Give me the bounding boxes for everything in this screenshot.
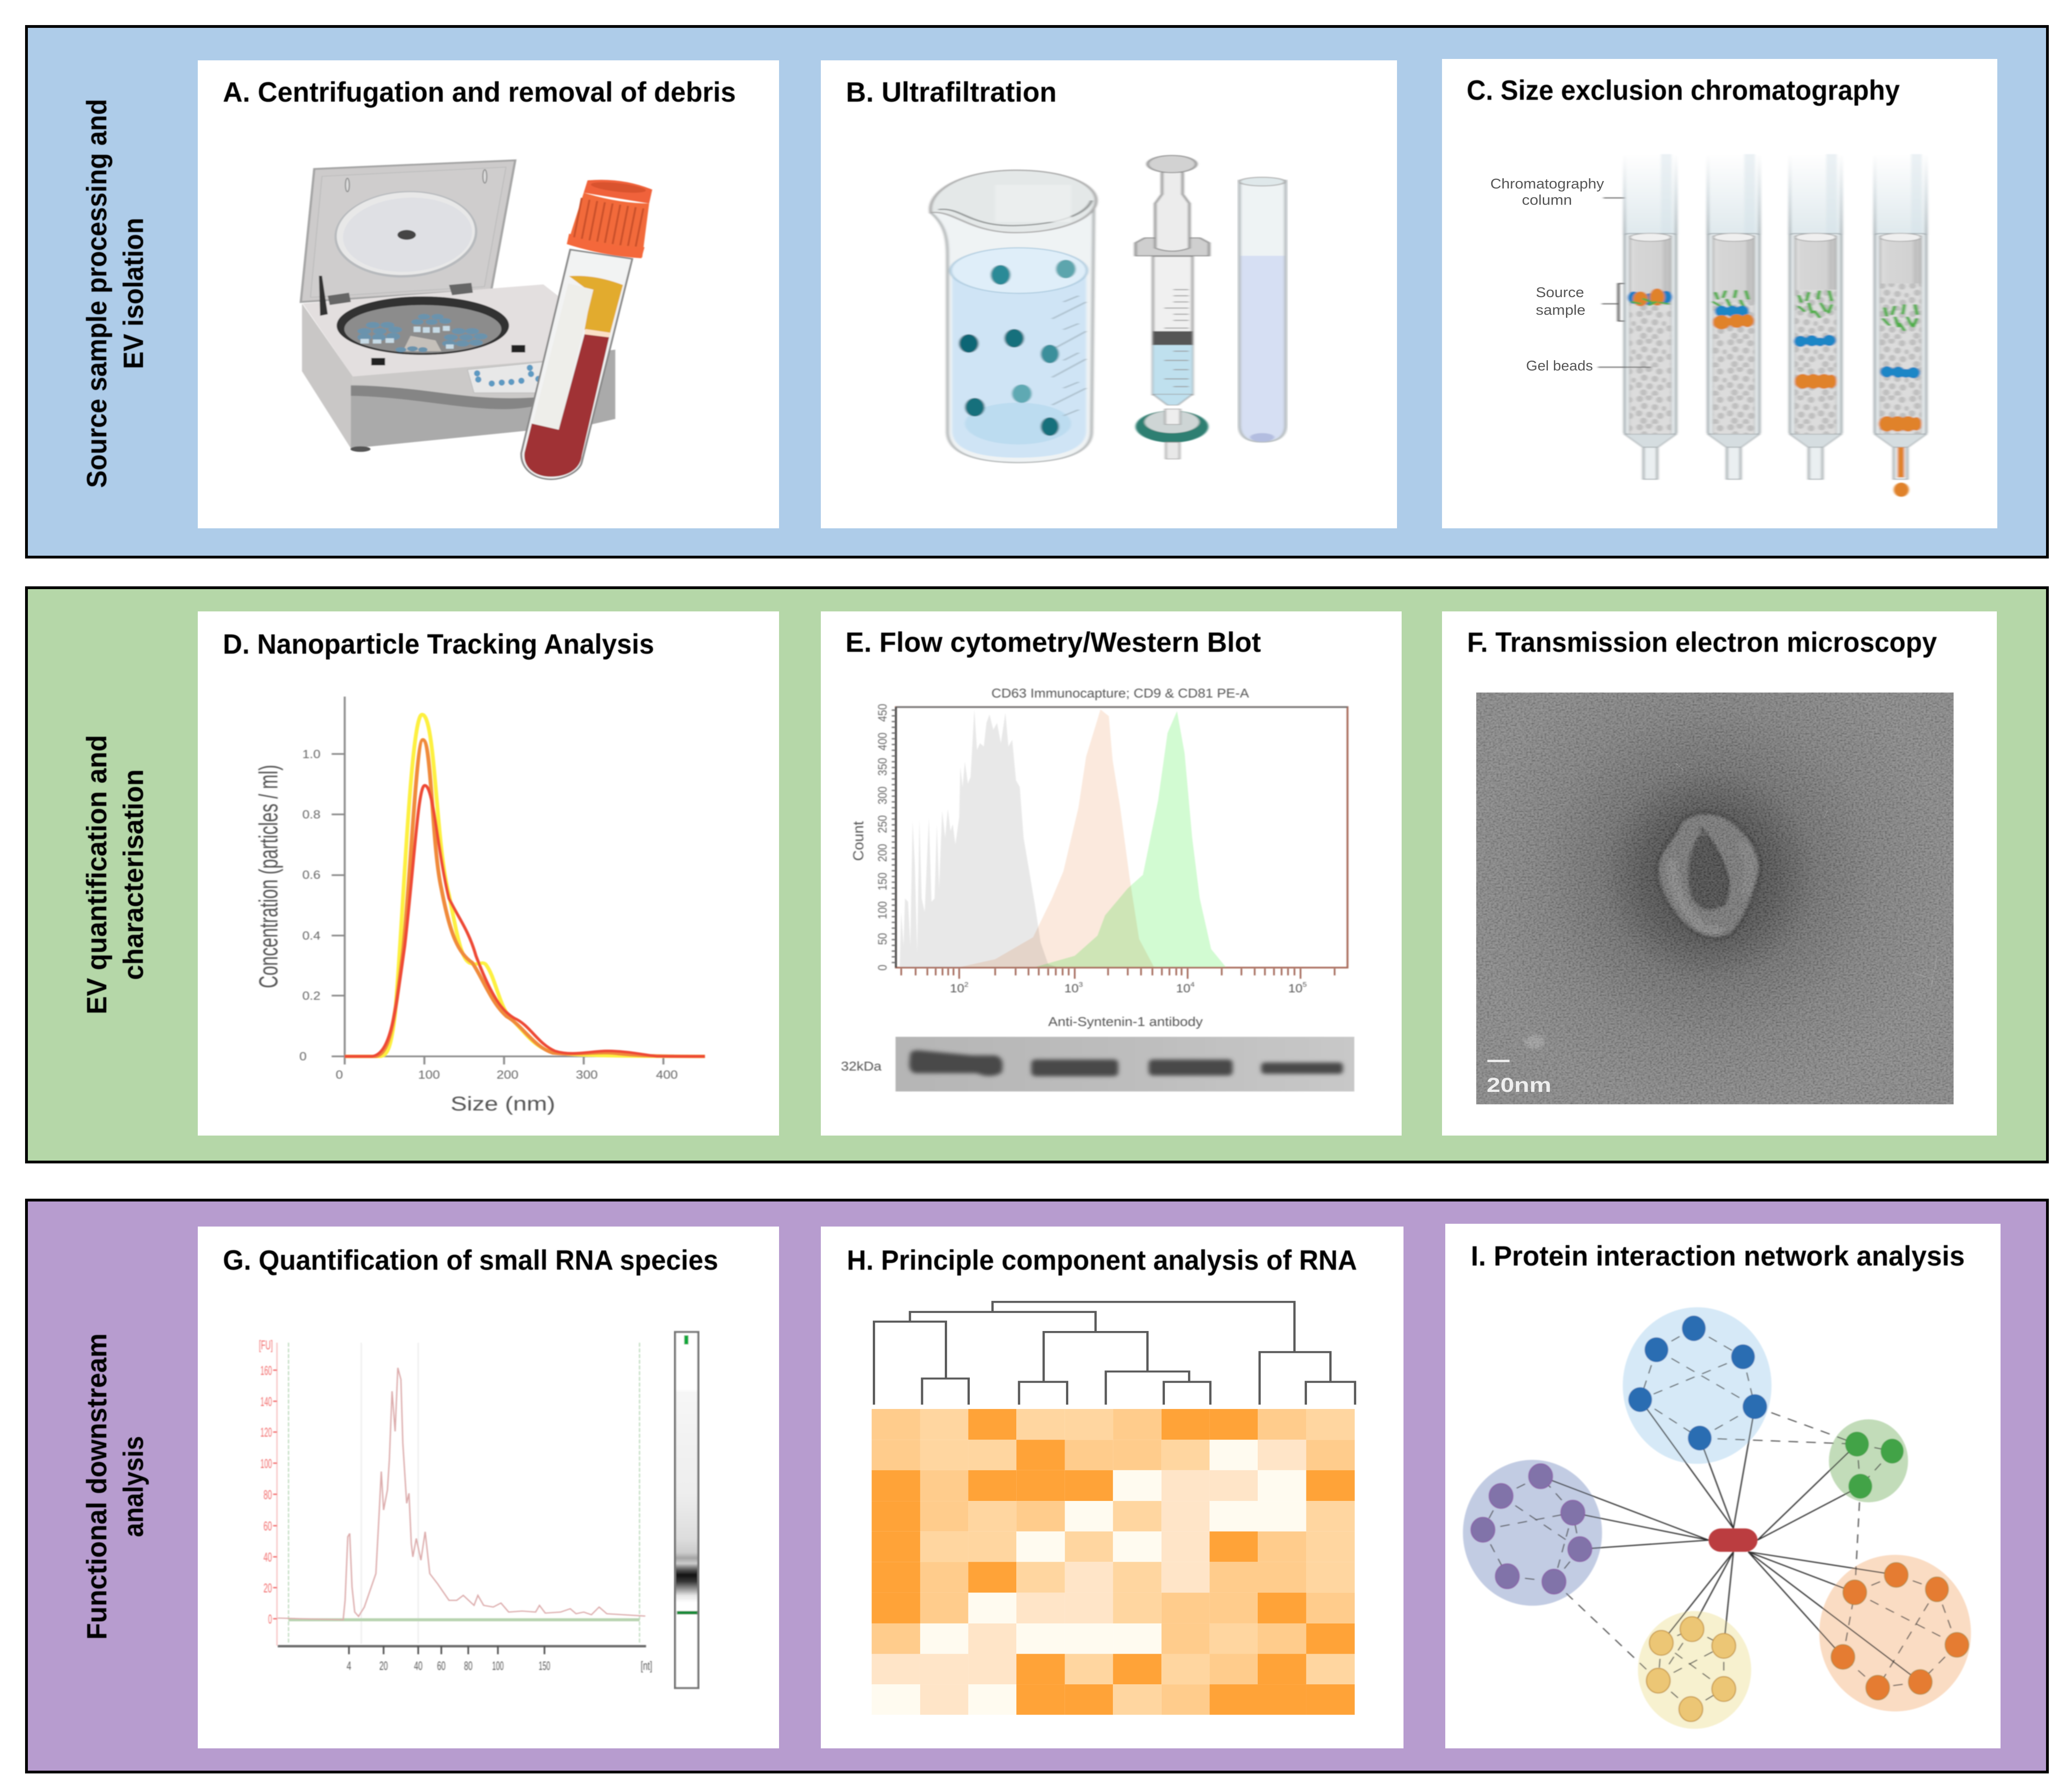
chart: electropherogram: 0 bbox=[268, 1612, 272, 1626]
band heading: EV quantification and characterisation: characterisation bbox=[118, 769, 149, 980]
chart: electropherogram: 20 bbox=[379, 1659, 388, 1673]
image: western blot: 32kDa bbox=[841, 1059, 882, 1074]
panel: G small RNA quantification bbox=[198, 1227, 779, 1748]
line chart: size distribution: 0 bbox=[299, 1050, 306, 1063]
line chart: size distribution: 0.2 bbox=[302, 989, 320, 1002]
chart: electropherogram: 40 bbox=[264, 1550, 272, 1565]
band heading: source sample processing and EV isolation bbox=[81, 99, 149, 488]
dendrogram bbox=[874, 1302, 1355, 1405]
heatmap bbox=[872, 1409, 1355, 1715]
chart: flow cytometry histogram: 10 bbox=[950, 982, 964, 995]
title D: D. Nanoparticle Tracking Analysis bbox=[223, 629, 654, 660]
row 9 bbox=[872, 1654, 1355, 1684]
label: gel beads: Gel beads bbox=[1526, 357, 1593, 374]
line chart: size distribution: 0.4 bbox=[302, 929, 320, 942]
icon: centrifuge and blood tube bbox=[301, 160, 652, 479]
title E: E. Flow cytometry/Western Blot bbox=[845, 627, 1261, 658]
chart: flow cytometry histogram: 400 bbox=[876, 733, 890, 751]
chart: electropherogram: 150 bbox=[539, 1659, 550, 1673]
chart: electropherogram: [nt] bbox=[641, 1659, 652, 1673]
title G: G. Quantification of small RNA species bbox=[223, 1245, 718, 1276]
line chart: size distribution: 300 bbox=[576, 1068, 598, 1081]
chart: flow cytometry histogram: 3 bbox=[1078, 981, 1083, 988]
chart: electropherogram: 80 bbox=[464, 1659, 473, 1673]
chart: flow cytometry histogram: 450 bbox=[876, 704, 890, 722]
chart: electropherogram: 80 bbox=[264, 1488, 272, 1502]
line chart: size distribution: 0.6 bbox=[302, 869, 320, 882]
image: gel lane bbox=[675, 1332, 698, 1688]
diagram: chromatography columns bbox=[1598, 154, 1928, 497]
chart: electropherogram: 40 bbox=[414, 1659, 422, 1673]
yellow nodes bbox=[1646, 1617, 1735, 1721]
chart: flow cytometry histogram: 5 bbox=[1303, 981, 1307, 988]
line chart: size distribution: 100 bbox=[418, 1068, 440, 1081]
cluster halos bbox=[1463, 1307, 1971, 1729]
solid links to hub bbox=[1540, 1400, 1920, 1682]
chart: electropherogram bbox=[259, 1338, 652, 1673]
chart: flow cytometry histogram: 300 bbox=[876, 786, 890, 805]
chart: electropherogram: 120 bbox=[260, 1426, 272, 1440]
row 5 bbox=[872, 1532, 1355, 1562]
band heading: EV quantification and characterisation: EV quantification and bbox=[81, 735, 112, 1014]
label: chromatography column: Chromatography bbox=[1490, 175, 1605, 192]
band heading: source sample processing and EV isolation: Source sample processing and bbox=[81, 99, 112, 488]
line chart: size distribution: 400 bbox=[656, 1068, 678, 1081]
chart: electropherogram: 160 bbox=[260, 1363, 272, 1378]
label: chromatography column bbox=[1490, 175, 1605, 208]
image: electron micrograph of vesicle bbox=[1476, 693, 1954, 1104]
label: source sample bbox=[1536, 284, 1585, 318]
icon: syringe filter bbox=[1136, 156, 1209, 459]
chart: electropherogram: 100 bbox=[260, 1457, 272, 1471]
row 8 bbox=[872, 1623, 1355, 1654]
panel: E flow cytometry and western blot bbox=[821, 611, 1402, 1136]
chart: flow cytometry histogram: 250 bbox=[876, 815, 890, 833]
title F: F. Transmission electron microscopy bbox=[1467, 627, 1937, 658]
line chart: size distribution bbox=[254, 696, 705, 1115]
chart: flow cytometry histogram: 50 bbox=[876, 933, 890, 945]
orange nodes bbox=[1831, 1563, 1969, 1700]
band heading: functional downstream analysis bbox=[81, 1333, 149, 1640]
row 2 bbox=[872, 1440, 1355, 1470]
band: functional downstream analysis bbox=[26, 1200, 2047, 1772]
band heading: EV quantification and characterisation bbox=[81, 735, 149, 1014]
chart: electropherogram: 140 bbox=[260, 1395, 272, 1409]
row 3 bbox=[872, 1470, 1355, 1501]
network diagram bbox=[1463, 1307, 1971, 1729]
band: EV quantification bbox=[26, 588, 2047, 1162]
chart: flow cytometry histogram: CD63 Immunocapture; CD9 & CD81 PE-A bbox=[991, 686, 1249, 701]
line chart: size distribution: 0.8 bbox=[302, 808, 320, 821]
row 4 bbox=[872, 1501, 1355, 1532]
dashed links bbox=[1483, 1328, 1957, 1709]
chart: electropherogram: 60 bbox=[437, 1659, 446, 1673]
panel: D nanoparticle tracking bbox=[198, 611, 779, 1136]
icon: test tube bbox=[1240, 177, 1286, 442]
line chart: size distribution: Size (nm) bbox=[450, 1093, 555, 1115]
chart: electropherogram: 4 bbox=[347, 1659, 351, 1673]
line chart: size distribution: 200 bbox=[497, 1068, 519, 1081]
panel: I protein interaction network bbox=[1445, 1224, 2001, 1748]
panel: A centrifugation bbox=[198, 60, 779, 528]
line chart: size distribution: 0 bbox=[336, 1068, 343, 1081]
row 6 bbox=[872, 1562, 1355, 1593]
chart: flow cytometry histogram: 350 bbox=[876, 758, 890, 776]
title I: I. Protein interaction network analysis bbox=[1471, 1240, 1965, 1272]
chart: flow cytometry histogram: 2 bbox=[964, 981, 968, 988]
chart: flow cytometry histogram: 10 bbox=[1288, 982, 1303, 995]
row 1 bbox=[872, 1409, 1355, 1440]
hub protein bbox=[1709, 1528, 1757, 1552]
blue nodes bbox=[1628, 1316, 1767, 1450]
title C: C. Size exclusion chromatography bbox=[1467, 75, 1900, 106]
chart: flow cytometry histogram: 100 bbox=[876, 901, 890, 919]
label: source sample: Source bbox=[1536, 284, 1584, 300]
label: source sample: sample bbox=[1536, 302, 1585, 318]
title H: H. Principle component analysis of RNA bbox=[847, 1245, 1357, 1276]
chart: flow cytometry histogram: 0 bbox=[876, 965, 890, 971]
green nodes bbox=[1845, 1432, 1904, 1499]
panel: F transmission electron microscopy bbox=[1442, 611, 1997, 1136]
chart: electropherogram: 20 bbox=[264, 1581, 272, 1595]
panel: C size exclusion chromatography bbox=[1442, 59, 1997, 528]
chart: flow cytometry histogram: 10 bbox=[1064, 982, 1078, 995]
image: western blot bbox=[841, 1015, 1354, 1091]
chart: electropherogram: [FU] bbox=[259, 1338, 273, 1352]
line chart: size distribution: Concentration (particles / ml) bbox=[254, 765, 283, 988]
icon: beaker with vesicles bbox=[930, 170, 1096, 462]
line chart: size distribution: 1.0 bbox=[302, 747, 320, 760]
purple nodes bbox=[1471, 1464, 1592, 1594]
row 10 bbox=[872, 1684, 1355, 1715]
chart: flow cytometry histogram: Count bbox=[851, 821, 867, 861]
title B: B. Ultrafiltration bbox=[846, 77, 1057, 108]
band heading: functional downstream analysis: analysis bbox=[118, 1436, 149, 1537]
chart: flow cytometry histogram bbox=[851, 686, 1347, 995]
panel: B ultrafiltration bbox=[821, 60, 1397, 528]
chart: flow cytometry histogram: 150 bbox=[876, 872, 890, 890]
chart: flow cytometry histogram: 200 bbox=[876, 844, 890, 862]
chart: electropherogram: 60 bbox=[264, 1519, 272, 1533]
chart: flow cytometry histogram: 10 bbox=[1176, 982, 1190, 995]
row 7 bbox=[872, 1593, 1355, 1623]
label: chromatography column: column bbox=[1522, 192, 1572, 208]
band heading: functional downstream analysis: Functional downstream bbox=[81, 1333, 112, 1640]
chart: flow cytometry histogram: 4 bbox=[1190, 981, 1195, 988]
title A: A. Centrifugation and removal of debris bbox=[223, 77, 736, 108]
band: source sample processing bbox=[26, 26, 2047, 557]
scale bar label: 20nm bbox=[1487, 1074, 1551, 1096]
panel: H heatmap bbox=[821, 1227, 1403, 1748]
band heading: source sample processing and EV isolation: EV isolation bbox=[118, 218, 149, 369]
chart: electropherogram: 100 bbox=[492, 1659, 504, 1673]
image: western blot: Anti-Syntenin-1 antibody bbox=[1048, 1015, 1203, 1029]
